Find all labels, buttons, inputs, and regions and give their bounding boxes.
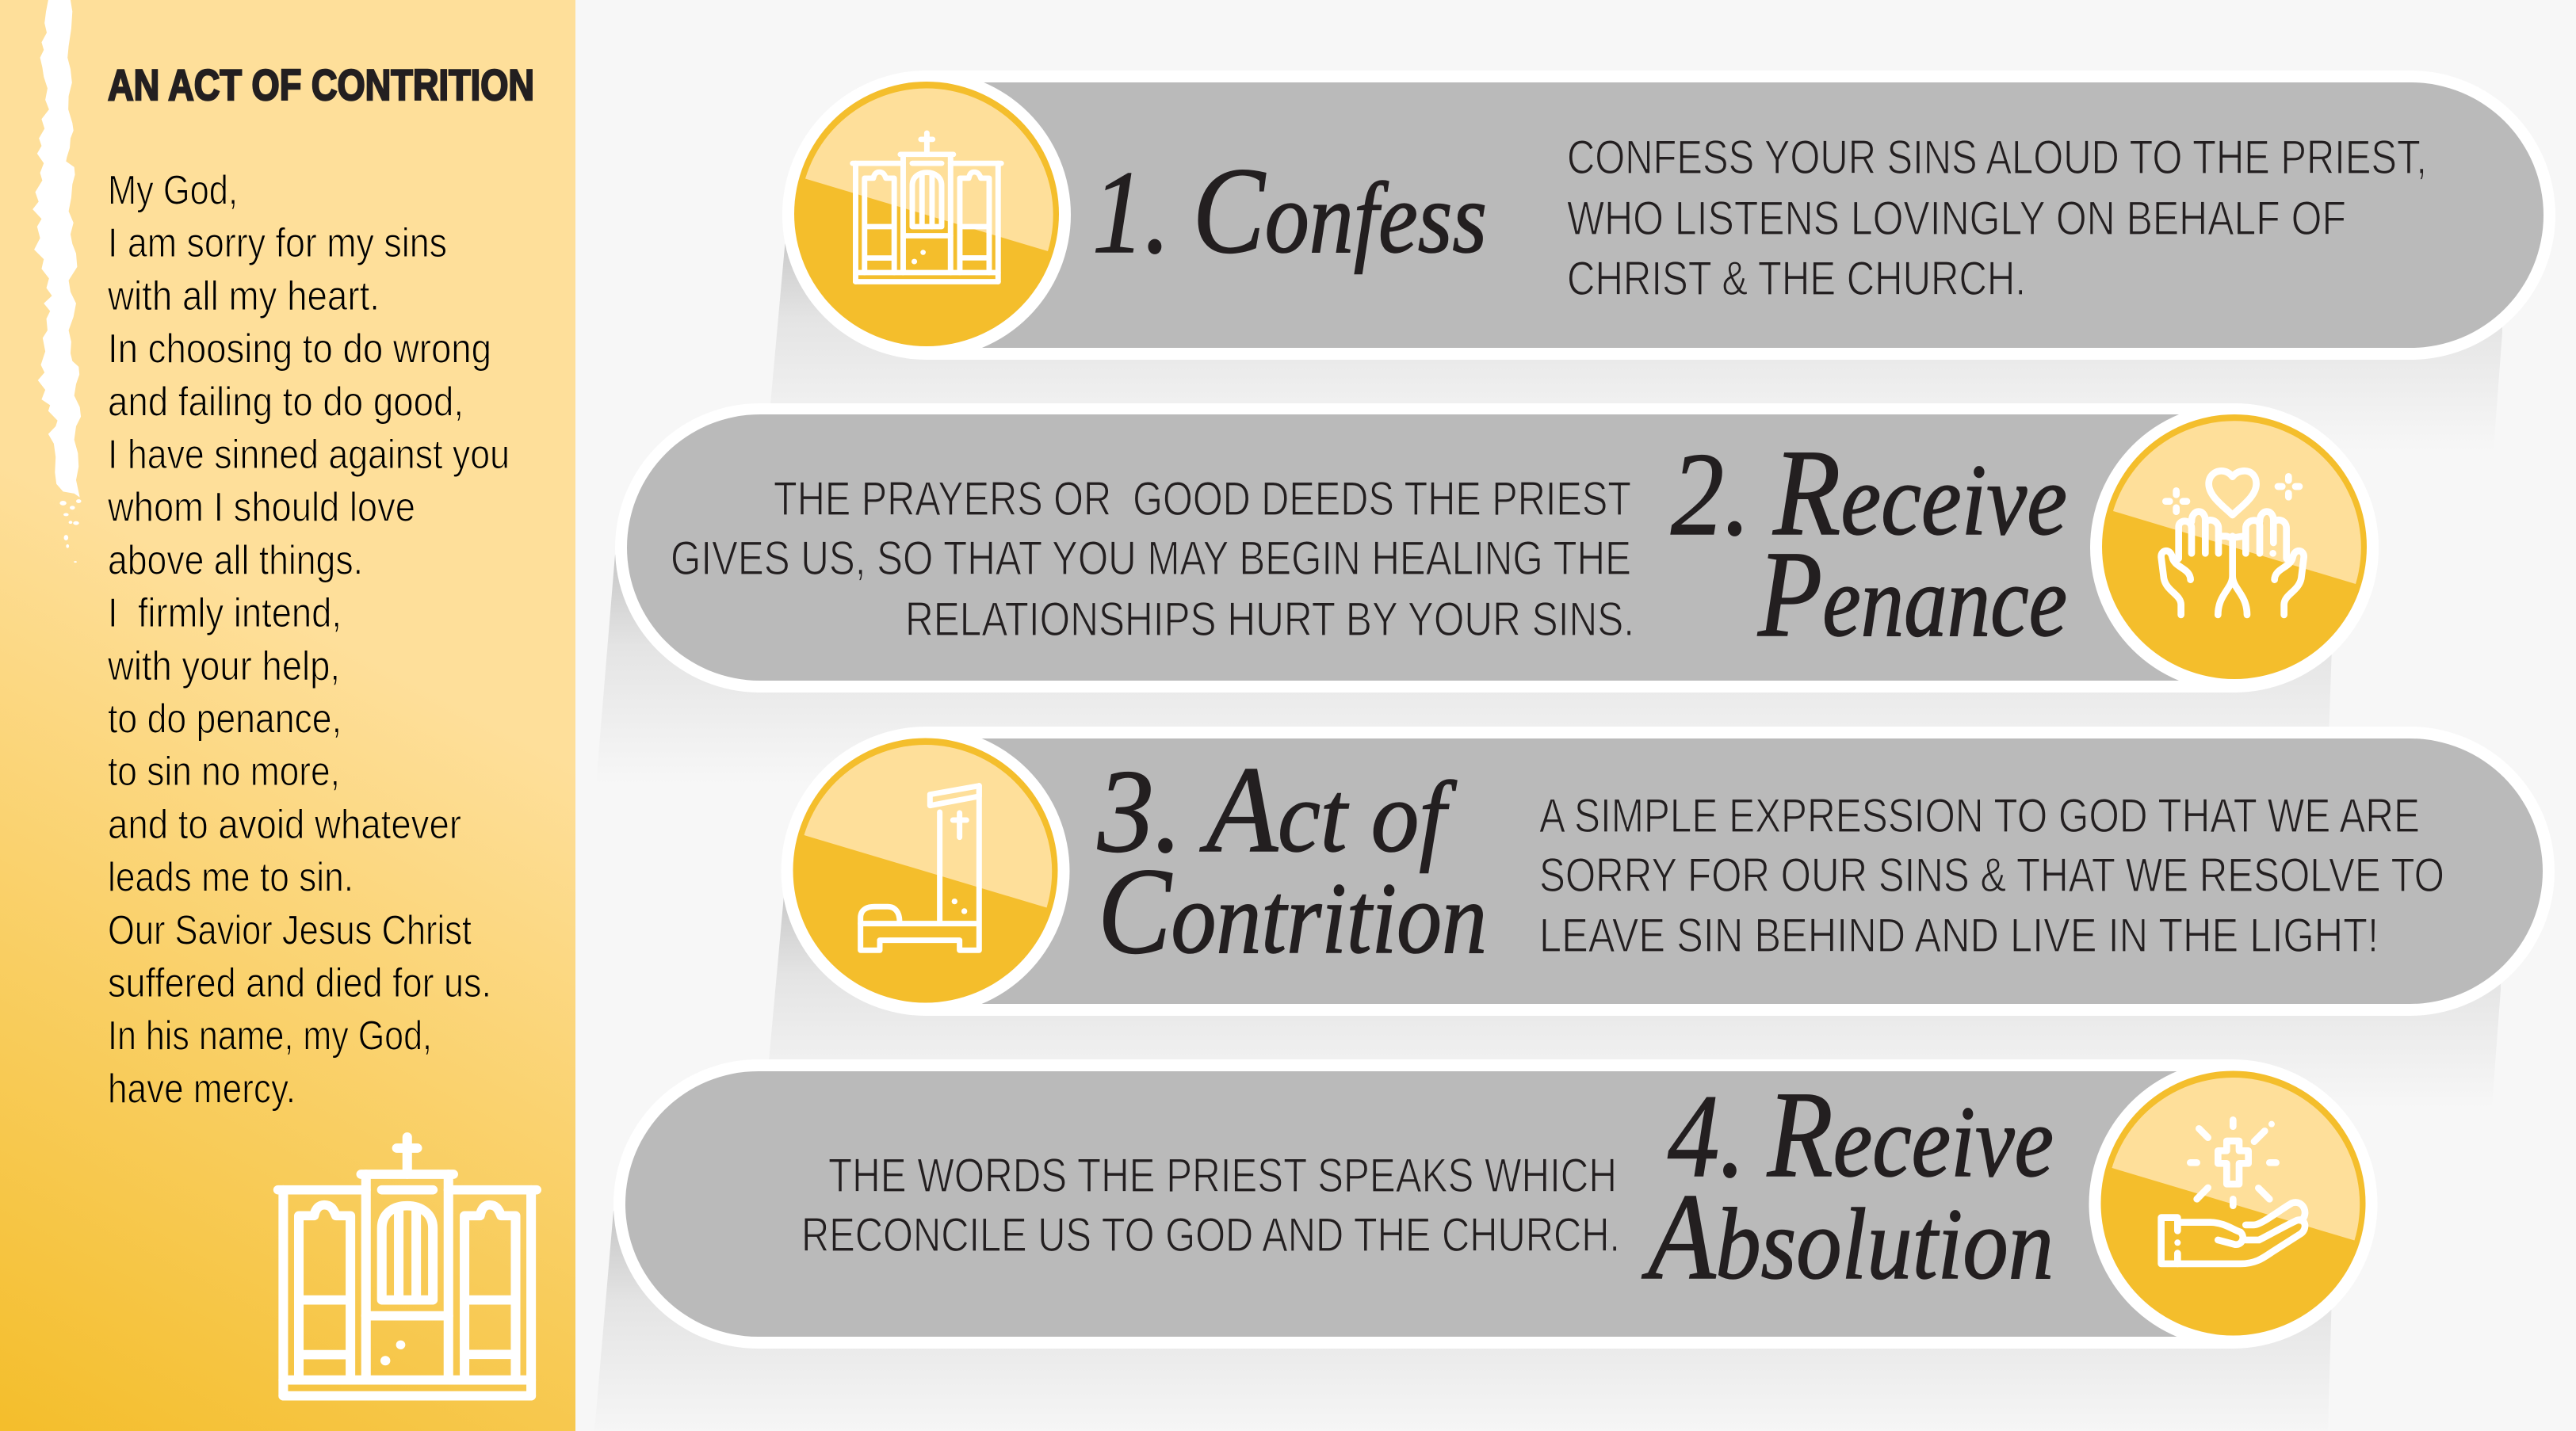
text block: prayer: I have sinned against you <box>108 432 510 478</box>
text block: prayer: I firmly intend, <box>108 590 342 636</box>
text block: prayer: above all things. <box>108 537 363 583</box>
text block: prayer: In his name, my God, <box>108 1013 432 1059</box>
text block: prayer: leads me to sin. <box>108 855 354 901</box>
step title: 3. Act of Contrition <box>1097 741 1487 979</box>
step description: act of contrition: A SIMPLE EXPRESSION TO GOD THAT WE ARE <box>1539 789 2420 842</box>
step title: 4. Receive Absolution: Absolution <box>1642 1168 2054 1305</box>
icon: confessional badge <box>794 82 1059 346</box>
text block: prayer: I am sorry for my sins <box>108 220 447 266</box>
step description: receive absolution: THE WORDS THE PRIEST SPEAKS WHICH <box>828 1149 1617 1202</box>
step title: 4. Receive Absolution: 4. Receive <box>1668 1066 2054 1203</box>
step description: act of contrition <box>1539 789 2444 962</box>
icon: large confessional <box>278 1137 537 1396</box>
step shadows <box>594 230 2502 1431</box>
step description: confess: CHRIST & THE CHURCH. <box>1567 252 2026 305</box>
icon: hands and heart badge <box>2102 414 2367 679</box>
step description: receive penance: GIVES US, SO THAT YOU MAY BEGIN HEALING THE <box>671 532 1631 585</box>
step description: receive absolution: RECONCILE US TO GOD AND THE CHURCH. <box>801 1208 1620 1261</box>
panel: step 2 receive penance <box>615 403 2379 693</box>
step description: act of contrition: LEAVE SIN BEHIND AND LIVE IN THE LIGHT! <box>1539 909 2379 962</box>
text block: prayer <box>107 168 510 1112</box>
panel: step 3 act of contrition <box>782 727 2555 1016</box>
text block: prayer: and to avoid whatever <box>108 802 461 848</box>
step title: 3. Act of Contrition: 3. Act of <box>1097 741 1458 878</box>
text block: prayer: have mercy. <box>108 1066 296 1112</box>
step description: receive penance: THE PRAYERS OR GOOD DEEDS THE PRIEST <box>774 472 1631 525</box>
step title: 2. Receive Penance: Penance <box>1757 525 2067 662</box>
text block: prayer: and failing to do good, <box>108 379 464 425</box>
text block: prayer: to sin no more, <box>108 749 340 795</box>
step description: receive penance: RELATIONSHIPS HURT BY YOUR SINS. <box>905 593 1634 646</box>
text block: prayer: with your help, <box>107 643 340 689</box>
step title: 3. Act of Contrition: Contrition <box>1098 842 1487 979</box>
heading: an act of contrition: AN ACT OF CONTRITION <box>108 60 534 109</box>
step description: confess <box>1567 131 2427 305</box>
step description: confess: WHO LISTENS LOVINGLY ON BEHALF OF <box>1567 192 2346 245</box>
step description: receive penance <box>671 472 1634 646</box>
text block: prayer: with all my heart. <box>107 273 380 319</box>
text block: prayer: suffered and died for us. <box>108 960 491 1006</box>
text block: prayer: to do penance, <box>108 696 342 742</box>
step title: 1. Confess: 1. Confess <box>1092 142 1487 279</box>
icon: hand with cross badge <box>2100 1071 2365 1336</box>
panel: step 1 confess <box>782 71 2555 360</box>
torn white brush stripe <box>32 0 82 563</box>
text block: prayer: whom I should love <box>107 485 415 531</box>
text block: prayer: My God, <box>108 168 238 214</box>
text block: prayer: Our Savior Jesus Christ <box>108 907 472 953</box>
step title: 2. Receive Penance <box>1671 424 2067 662</box>
text block: prayer: In choosing to do wrong <box>108 326 491 372</box>
panel: prayer sidebar <box>0 0 575 1431</box>
panel: step 4 receive absolution <box>613 1059 2378 1349</box>
step title: 2. Receive Penance: 2. Receive <box>1671 424 2067 561</box>
step title: 4. Receive Absolution <box>1642 1066 2054 1305</box>
step description: receive absolution <box>801 1149 1620 1261</box>
icon: kneeler badge <box>793 738 1057 1003</box>
